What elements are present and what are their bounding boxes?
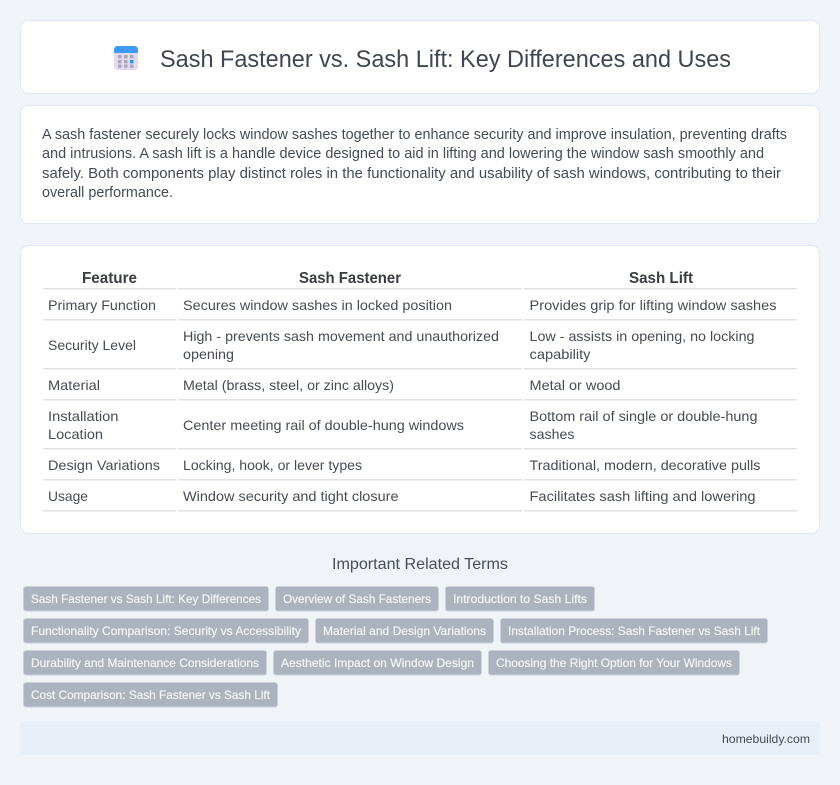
tag	[24, 618, 308, 643]
table header row: Sash Lift	[629, 270, 693, 287]
row: usage: Usage	[48, 488, 88, 504]
text block: introduction: A sash fastener securely locks window sashes together to enhance security and improve insulation, preventing drafts	[42, 127, 787, 143]
row: material: Metal (brass, steel, or zinc alloys)	[183, 377, 394, 393]
table header row	[82, 270, 693, 287]
row: design variations	[48, 457, 760, 473]
row: usage: Window security and tight closure	[183, 488, 399, 504]
row: installation location: Bottom rail of single or double-hung	[530, 408, 758, 424]
tag: Sash Fastener vs Sash Lift: Key Differences	[31, 592, 261, 606]
row: security level	[48, 328, 754, 362]
panel: comparison table	[20, 246, 820, 534]
panel: title header	[20, 20, 820, 94]
icon: calendar	[114, 46, 138, 70]
tag: Overview of Sash Fasteners	[283, 592, 431, 606]
row: security level: High - prevents sash movement and unauthorized	[183, 328, 499, 344]
row: installation location: sashes	[530, 426, 574, 442]
tag: Introduction to Sash Lifts	[453, 592, 587, 606]
row: installation location: Center meeting rail of double-hung windows	[183, 417, 464, 433]
tag: Durability and Maintenance Considerations	[31, 656, 259, 670]
tag: Choosing the Right Option for Your Windows	[496, 656, 732, 670]
tag	[24, 682, 278, 707]
tag	[24, 586, 268, 611]
row: primary function: Primary Function	[48, 297, 156, 313]
tag: Functionality Comparison: Security vs Accessibility	[31, 624, 301, 638]
row: material	[48, 377, 620, 393]
related terms tags	[24, 586, 768, 707]
table header row: Feature	[82, 270, 137, 287]
tag	[488, 650, 740, 675]
tag: Installation Process: Sash Fastener vs Sash Lift	[508, 624, 761, 638]
tag	[274, 650, 482, 675]
panel: introduction	[20, 106, 820, 224]
row: primary function: Provides grip for lifting window sashes	[530, 297, 776, 313]
row: installation location: Location	[48, 426, 103, 442]
row: usage: Facilitates sash lifting and lowering	[530, 488, 756, 504]
row: material: Material	[48, 377, 100, 393]
footer: homebuildy.com	[722, 732, 810, 746]
tag	[316, 618, 494, 643]
row: security level: Security Level	[48, 337, 136, 353]
row: primary function	[48, 297, 776, 313]
row: material: Metal or wood	[530, 377, 620, 393]
tag: Aesthetic Impact on Window Design	[281, 656, 474, 670]
row: installation location: Installation	[48, 408, 118, 424]
table header row: Sash Fastener	[299, 270, 401, 287]
row: usage	[48, 488, 756, 504]
heading: related terms: Important Related Terms	[332, 556, 508, 573]
tag	[446, 586, 594, 611]
row: design variations: Locking, hook, or lever types	[183, 457, 362, 473]
tag	[500, 618, 768, 643]
row: design variations: Design Variations	[48, 457, 160, 473]
tag: Cost Comparison: Sash Fastener vs Sash Lift	[31, 688, 271, 702]
row: security level: capability	[530, 346, 590, 362]
tag	[24, 650, 266, 675]
row: security level: Low - assists in opening, no locking	[530, 328, 754, 344]
row: installation location	[48, 408, 758, 442]
tag: Material and Design Variations	[323, 624, 486, 638]
text block: introduction	[42, 127, 787, 201]
tag	[276, 586, 438, 611]
footer	[20, 721, 820, 755]
text block: introduction: safely. Both components play distinct roles in the functionality and usability of sash windows, contributing to their	[42, 166, 781, 182]
text block: introduction: overall performance.	[42, 185, 173, 201]
row: design variations: Traditional, modern, decorative pulls	[530, 457, 760, 473]
row: security level: opening	[183, 346, 234, 362]
row: primary function: Secures window sashes in locked position	[183, 297, 452, 313]
text block: introduction: and intrusions. A sash lift is a handle device designed to aid in lifting and lowering the window sash smoothly and	[42, 146, 764, 162]
title: Sash Fastener vs. Sash Lift: Key Differences and Uses	[160, 46, 731, 73]
